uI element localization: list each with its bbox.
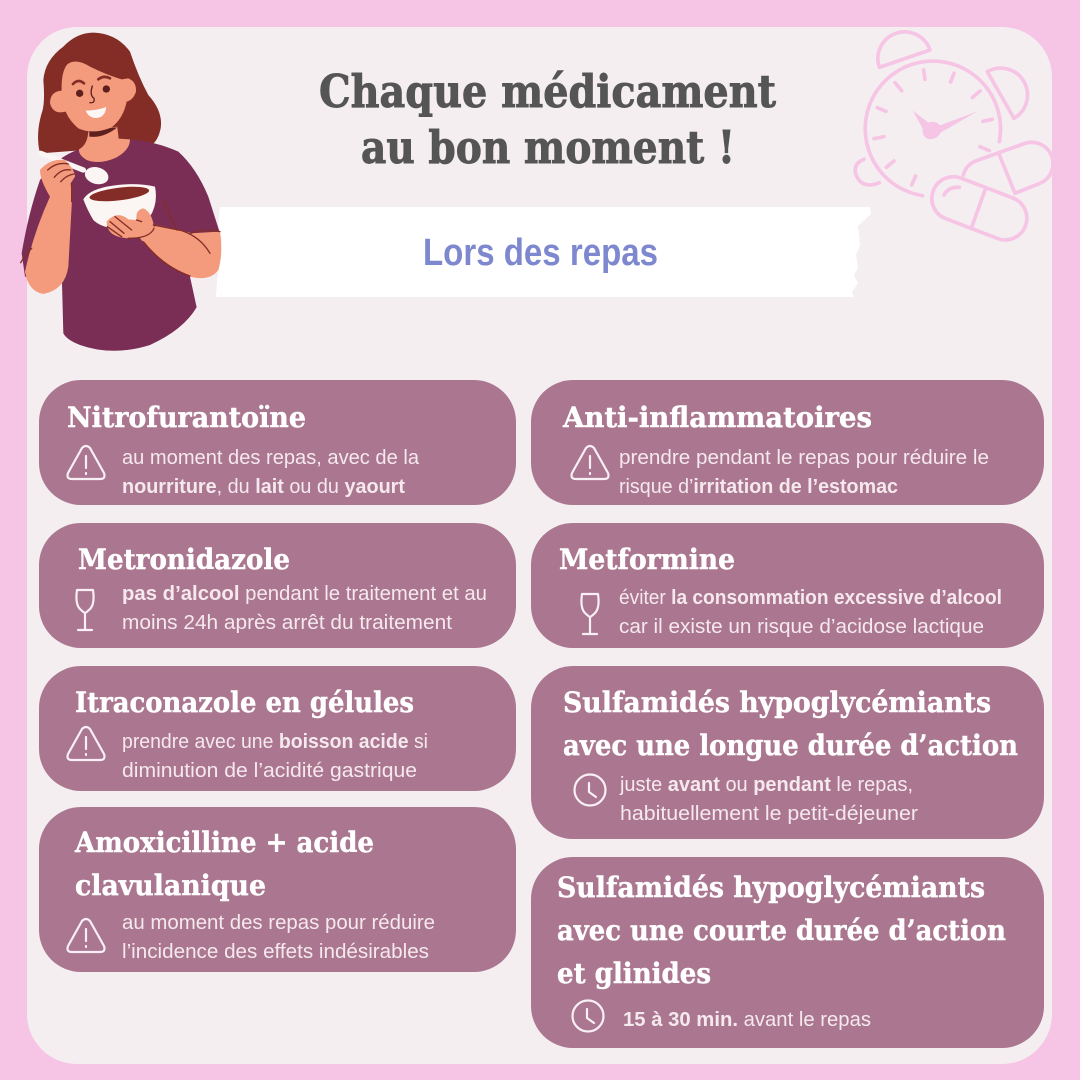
title [319, 65, 776, 174]
panel: Metformine: éviter la consommation excessive d’alcool [619, 587, 1002, 609]
panel: Sulfamidés longue durée: juste avant ou pendant le repas, [619, 774, 913, 796]
panel: Anti-inflammatoires: Anti-inflammatoires [562, 401, 872, 434]
panel: Sulfamidés longue durée: Sulfamidés hypoglycémiants [563, 686, 991, 719]
panel: Anti-inflammatoires [531, 380, 1044, 505]
panel: Sulfamidés courte durée et glinides: 15 à 30 min. avant le repas [623, 1009, 871, 1031]
panel: Metformine: Metformine [559, 543, 735, 576]
panel: Amoxicilline: au moment des repas pour réduire [122, 912, 435, 934]
panel: Metronidazole: pas d’alcool pendant le traitement et au [122, 583, 487, 605]
panel: Sulfamidés courte durée et glinides: et glinides [557, 957, 711, 990]
panel: Itraconazole: prendre avec une boisson acide si [122, 731, 428, 753]
banner: torn tape [215, 207, 871, 297]
panel: Sulfamidés longue durée: habituellement le petit-déjeuner [620, 803, 918, 825]
panel: Sulfamidés courte durée et glinides: avec une courte durée d’action [557, 914, 1006, 947]
panel: Nitrofurantoïne: nourriture, du lait ou du yaourt [122, 476, 405, 498]
panel: Nitrofurantoïne [39, 380, 516, 505]
panel: Amoxicilline: l’incidence des effets indésirables [122, 941, 429, 963]
icon: alarm clock and pills [855, 32, 1053, 246]
illustration: woman eating [21, 33, 221, 351]
panel: Sulfamidés longue durée [531, 666, 1044, 839]
panel: Metronidazole: moins 24h après arrêt du traitement [122, 612, 452, 634]
panel: Itraconazole [39, 666, 516, 791]
panel: Anti-inflammatoires: risque d’irritation de l’estomac [619, 476, 898, 498]
panel: Sulfamidés longue durée: avec une longue durée d’action [563, 729, 1018, 762]
title: au bon moment ! [361, 121, 735, 174]
panel: Sulfamidés courte durée et glinides [531, 857, 1044, 1048]
panel: Nitrofurantoïne: Nitrofurantoïne [67, 401, 306, 434]
panel: Itraconazole: diminution de l’acidité gastrique [122, 760, 417, 782]
panel: Amoxicilline [39, 807, 516, 972]
subtitle: Lors des repas [423, 232, 658, 274]
title: Chaque médicament [319, 65, 776, 118]
panel: Metformine: car il existe un risque d’acidose lactique [619, 616, 984, 638]
panel: Metronidazole: Metronidazole [78, 543, 290, 576]
panel: Itraconazole: Itraconazole en gélules [75, 686, 414, 719]
panel: Amoxicilline: clavulanique [75, 869, 266, 902]
panel: Nitrofurantoïne: au moment des repas, avec de la [122, 447, 420, 469]
panel: Sulfamidés courte durée et glinides: Sulfamidés hypoglycémiants [557, 871, 985, 904]
panel: Metformine [531, 523, 1044, 648]
panel: Amoxicilline: Amoxicilline + acide [74, 826, 374, 859]
panel: Anti-inflammatoires: prendre pendant le repas pour réduire le [619, 447, 989, 469]
panel: Metronidazole [39, 523, 516, 648]
